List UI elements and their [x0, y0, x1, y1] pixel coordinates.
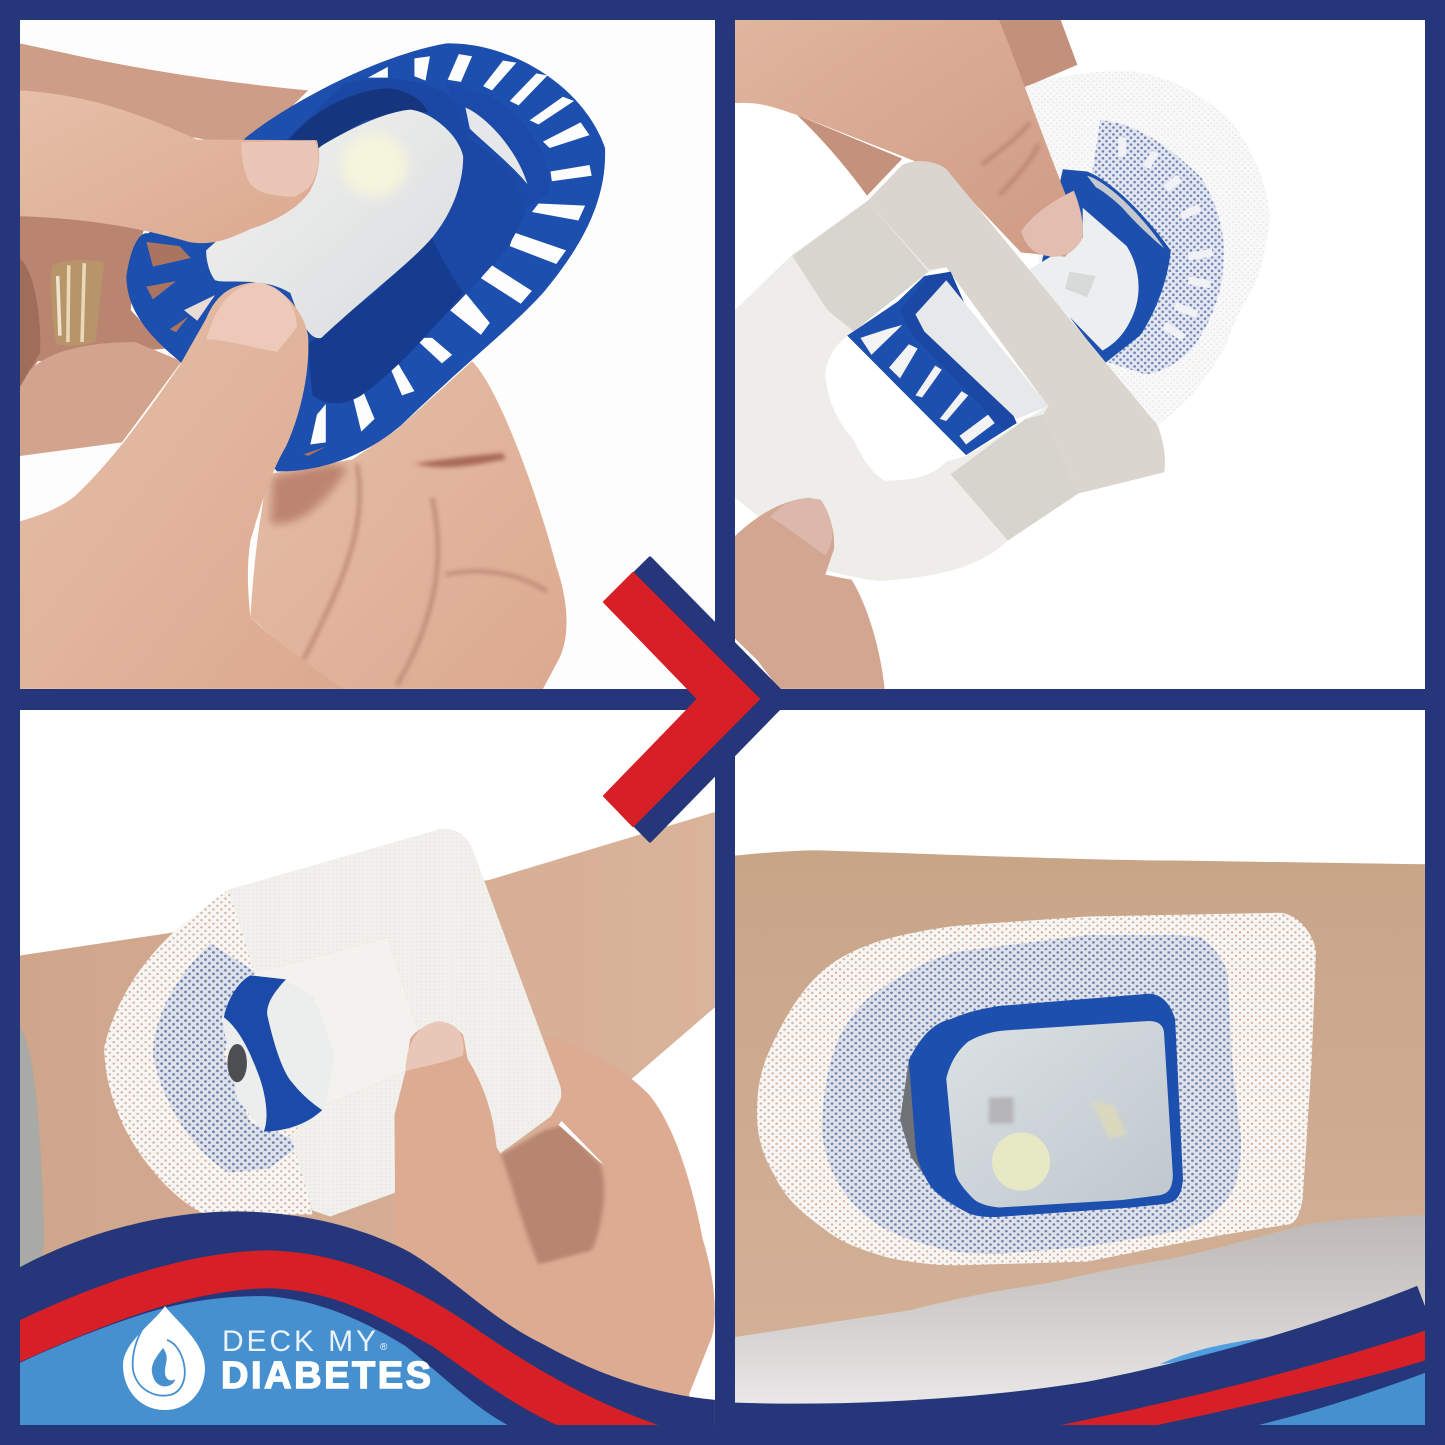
logo: Deck My Diabetes [123, 1306, 431, 1410]
panel: step 1 fitting the cover over the sensor [20, 20, 715, 689]
device through the paper window [847, 272, 1048, 455]
window glow [341, 133, 408, 197]
white slots [310, 54, 592, 444]
thumb nail [406, 1021, 464, 1071]
brand name: DECK MY [222, 1325, 376, 1358]
gauze patch [757, 913, 1316, 1265]
surface under arm [735, 1215, 1425, 1404]
arrow: chevron pointing right [604, 558, 788, 840]
blue slotted cover [126, 43, 605, 471]
light gap [558, 1121, 604, 1165]
back finger [999, 20, 1078, 87]
gauze patch [1008, 71, 1270, 425]
ring gaps [1122, 137, 1213, 338]
light blue sliver [1160, 1338, 1265, 1364]
translucent window [206, 110, 463, 338]
sleeve cuff [20, 1027, 44, 1268]
wave banner: left [20, 1211, 715, 1425]
back hand and fingers [20, 43, 567, 689]
shaded finger [501, 1125, 604, 1264]
forearm [20, 812, 715, 1278]
folded band [867, 161, 1165, 494]
ring on finger [51, 260, 104, 346]
lower thumb [735, 498, 885, 689]
wave banner: right [735, 1286, 1425, 1425]
backing paper [735, 161, 1165, 581]
brand name bold: DIABETES [221, 1355, 431, 1397]
pressing hand [395, 1021, 715, 1425]
front thumbs [20, 90, 344, 689]
left slots showing skin [146, 242, 326, 456]
forearm [735, 850, 1425, 1337]
device in the cut-out [222, 975, 335, 1132]
backing paper with window [228, 829, 561, 1217]
blue printed ring [822, 935, 1241, 1254]
frame shadow [308, 238, 463, 403]
faded print [153, 943, 304, 1173]
sensor with blue frame [900, 994, 1183, 1217]
icon: white water drop with swirl [123, 1306, 205, 1410]
frame inner shadow [289, 88, 428, 148]
gauze patch [104, 890, 313, 1215]
panel: step 2 peeling the backing paper [735, 20, 1425, 689]
panel: step 3 pressing the patch on the arm [20, 710, 715, 1425]
spoke gaps [860, 325, 995, 444]
raised frame [286, 78, 527, 403]
frame rim behind [445, 83, 549, 210]
registered mark: ® [380, 1342, 388, 1353]
sensor and blue frame [1025, 169, 1171, 363]
upper hand [735, 20, 1083, 257]
panel: step 4 patch applied on the arm [735, 710, 1425, 1425]
printed blue ring [1083, 120, 1224, 374]
